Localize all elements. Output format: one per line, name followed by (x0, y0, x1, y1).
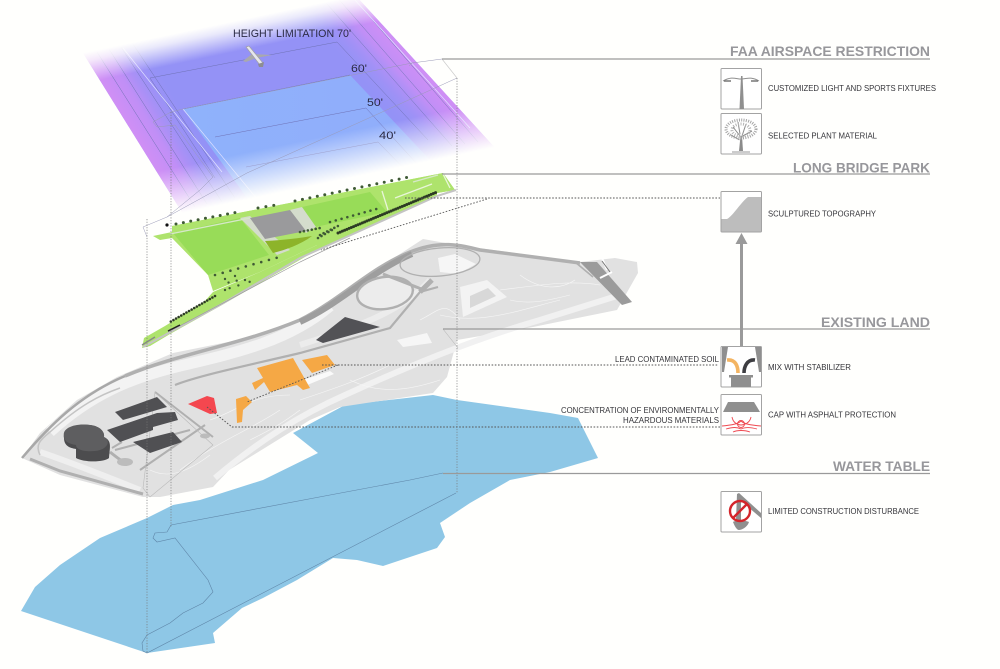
label: 40 foot: 40' (379, 130, 396, 142)
text: hazardous materials (561, 405, 719, 425)
icon: light fixture (721, 68, 762, 109)
text: light fixtures: CUSTOMIZED LIGHT AND SPORTS FIXTURES (768, 83, 936, 93)
rectangular buildings (107, 397, 182, 453)
heading: water table: WATER TABLE (833, 458, 930, 474)
text: lead soil: LEAD CONTAMINATED SOIL (615, 354, 719, 364)
dark triangle building (316, 317, 380, 343)
orange contaminated soil areas (236, 355, 335, 423)
round building (64, 425, 110, 461)
olive crescent lawn (265, 236, 312, 253)
paths and edges (142, 174, 456, 347)
dotted leader: hazardous materials (207, 407, 720, 427)
water table layer (21, 395, 598, 653)
bridge (580, 262, 632, 305)
airspace height limitation plane (83, 0, 497, 237)
heading: Long Bridge Park: LONG BRIDGE PARK (793, 160, 930, 176)
icon: sculptured topography (721, 192, 762, 232)
rule: Long Bridge Park (442, 173, 930, 175)
heading: existing land: EXISTING LAND (821, 314, 930, 330)
long bridge park layer (142, 173, 456, 348)
label: 60 foot: 60' (351, 63, 367, 75)
rule: existing land (443, 328, 930, 330)
arrow: mix up to topography (736, 233, 748, 346)
rule: FAA airspace (442, 58, 930, 60)
icon: airplane (243, 46, 272, 67)
icon: mix with stabilizer (721, 346, 762, 387)
contour lines (150, 275, 600, 474)
icon: no excavation (721, 492, 762, 532)
existing land layer (22, 239, 638, 497)
white highlight strips (40, 254, 620, 490)
label: 50 foot: 50' (367, 97, 383, 109)
rule: water table (443, 472, 930, 474)
vertical dotted connectors (147, 78, 457, 653)
dotted leader: topography (321, 198, 720, 250)
icon: tree (721, 114, 762, 154)
red hazardous area (188, 396, 217, 414)
text: topography: SCULPTURED TOPOGRAPHY (768, 209, 876, 219)
parcel outline (143, 329, 458, 497)
text: plant material: SELECTED PLANT MATERIAL (768, 131, 877, 141)
text: construction disturbance: LIMITED CONSTRUCTION DISTURBANCE (768, 506, 919, 516)
text: hazardous materials: HAZARDOUS MATERIALS (623, 415, 719, 425)
label: height limitation: HEIGHT LIMITATION 70' (233, 28, 351, 40)
text: hazardous materials: CONCENTRATION OF ENVIRONMENTALLY (561, 405, 719, 415)
dotted leader: lead soil (247, 365, 718, 402)
center paths (240, 216, 290, 255)
heading: FAA airspace restriction: FAA AIRSPACE RESTRICTION (730, 43, 930, 59)
sports field (250, 210, 306, 239)
text: mix with stabilizer: MIX WITH STABILIZER (768, 362, 851, 372)
highways and roads (22, 245, 593, 494)
lawn fields (173, 218, 269, 275)
text: asphalt cap: CAP WITH ASPHALT PROTECTION (768, 410, 896, 420)
icon: asphalt cap over biohazard (721, 394, 762, 435)
tree rows (170, 177, 437, 322)
